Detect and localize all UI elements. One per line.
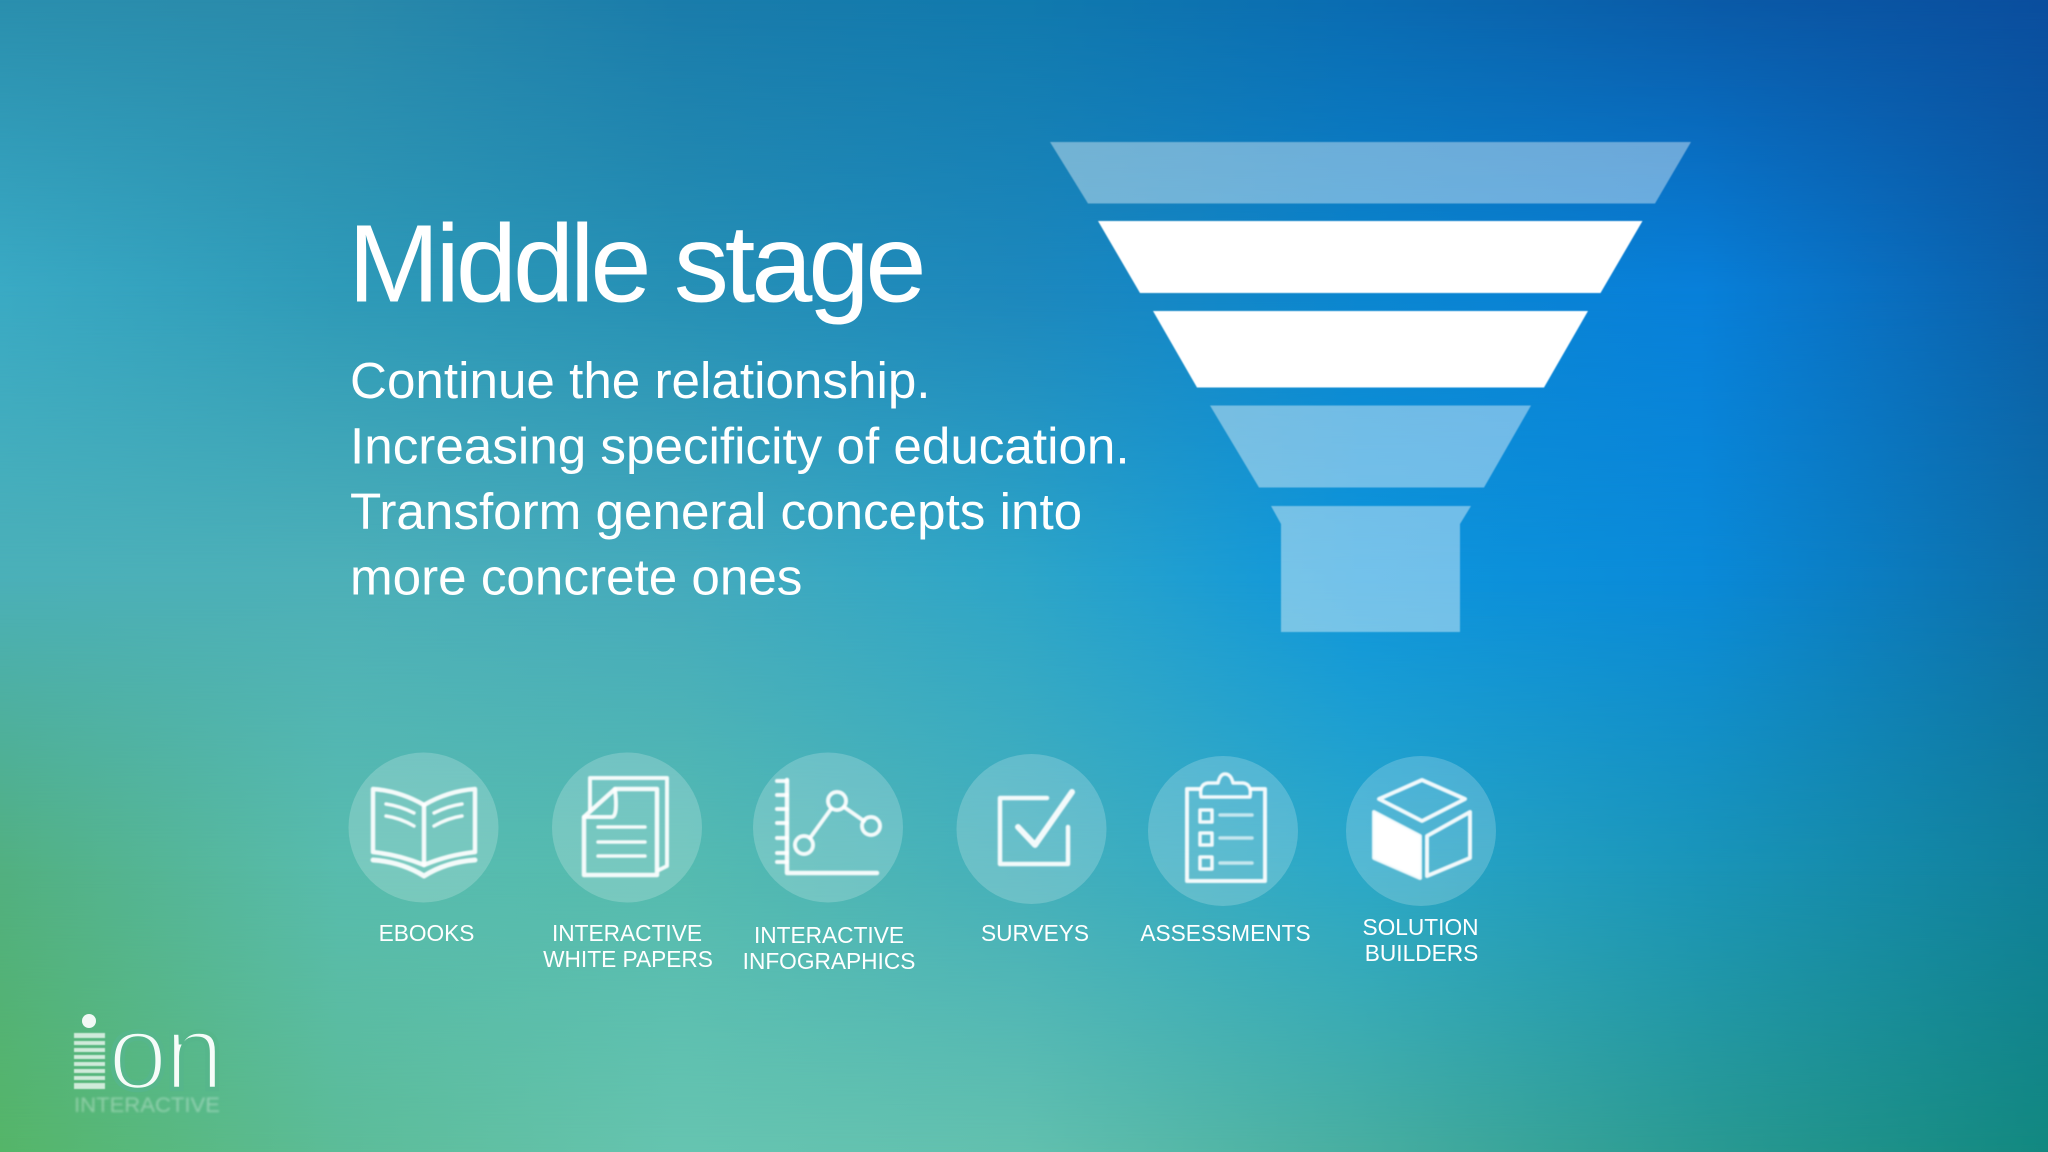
logo word: on [108, 992, 221, 1112]
label: EBOOKS [379, 920, 474, 946]
item: ebooks [348, 752, 498, 946]
circle [1346, 756, 1496, 906]
icon: cube [1374, 780, 1470, 878]
funnel band 4 [1210, 406, 1531, 488]
label: INTERACTIVE [552, 920, 702, 946]
label: SOLUTION [1363, 914, 1478, 940]
circle [956, 754, 1106, 904]
circle [348, 752, 498, 902]
item: solution builders [1346, 756, 1496, 966]
circle [552, 752, 702, 902]
label: ASSESSMENTS [1140, 920, 1311, 946]
logo mark: dot [82, 1014, 96, 1028]
circle [753, 752, 903, 902]
icon: line chart [777, 780, 880, 873]
icon: document [584, 778, 667, 875]
label: SURVEYS [981, 920, 1089, 946]
label: INTERACTIVE [754, 922, 904, 948]
funnel band 3 [1153, 311, 1588, 388]
item: surveys [956, 754, 1106, 946]
funnel band 2 [1098, 221, 1642, 293]
body text: Transform general concepts into [350, 483, 1082, 540]
label [543, 920, 713, 972]
body text: more concrete ones [350, 548, 802, 606]
icon: checkbox [1000, 792, 1072, 864]
label: INFOGRAPHICS [743, 948, 915, 974]
item: interactive white papers [543, 752, 713, 972]
body text: Continue the relationship. [350, 352, 931, 409]
icon: open book [373, 789, 475, 876]
label: WHITE PAPERS [543, 946, 713, 972]
funnel band 1 [1050, 142, 1691, 204]
logo: ion interactive [74, 992, 221, 1117]
icon: clipboard [1187, 774, 1265, 881]
label [1363, 914, 1478, 966]
logo mark: striped i [74, 1033, 105, 1089]
body text: Increasing specificity of education. [350, 418, 1130, 474]
circle [1148, 756, 1298, 906]
item: interactive infographics [743, 752, 915, 974]
label: BUILDERS [1365, 940, 1478, 966]
funnel stem [1271, 506, 1471, 632]
body text [350, 352, 1130, 606]
logo subtitle: INTERACTIVE [74, 1094, 220, 1117]
item: assessments [1140, 756, 1311, 946]
funnel [1050, 142, 1691, 632]
label [743, 922, 915, 974]
title: Middle stage [348, 202, 922, 326]
